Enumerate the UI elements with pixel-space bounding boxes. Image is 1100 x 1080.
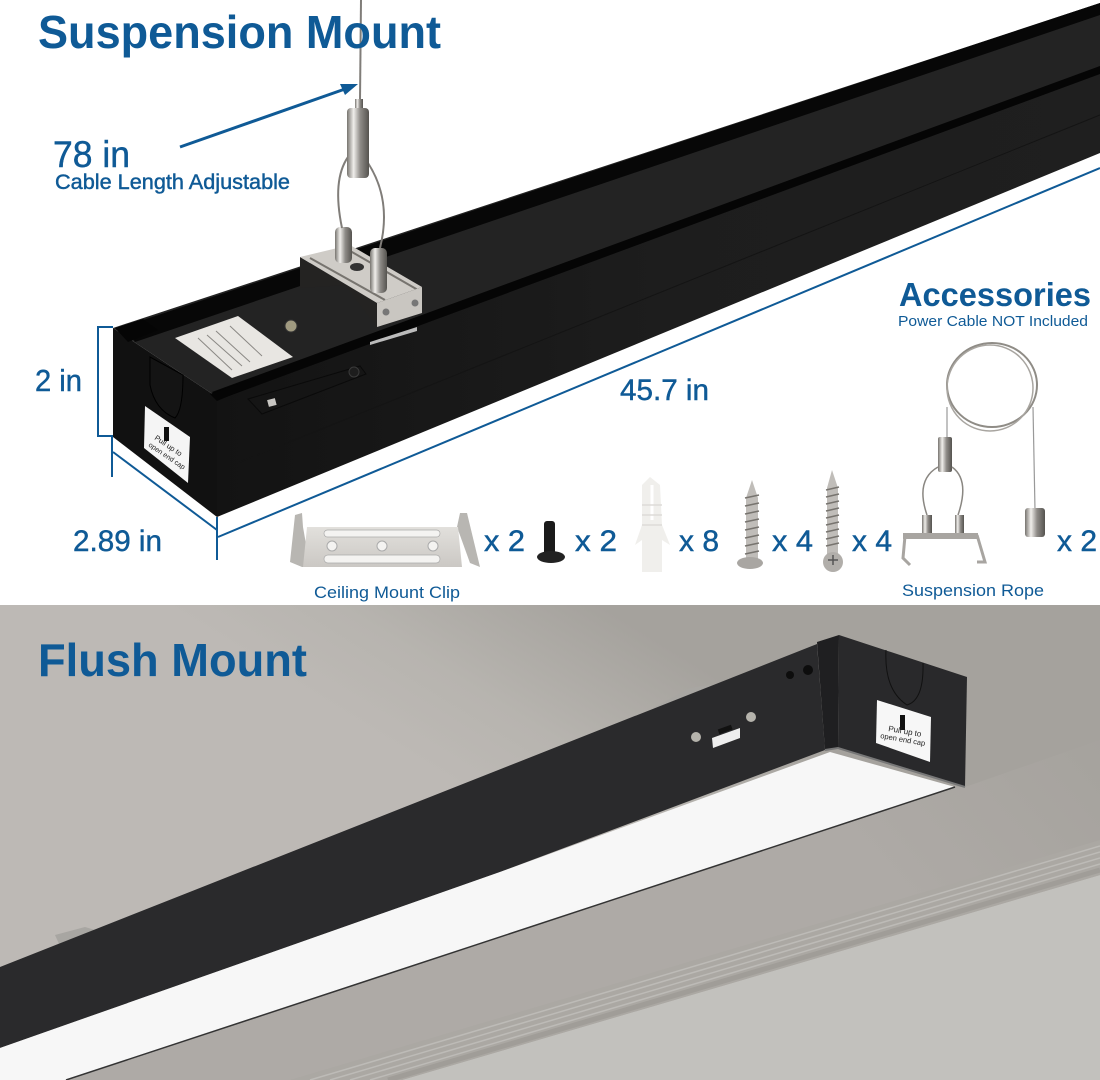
dimension: length 45.7 in	[218, 168, 1100, 537]
arrow: cable length	[180, 84, 358, 147]
mounting clips behind fixture	[55, 685, 715, 946]
accessories heading	[898, 276, 1091, 330]
long wood screw: x 4	[852, 525, 892, 558]
end cap label: open end cap	[880, 731, 926, 748]
suspension rope labels	[902, 525, 1097, 600]
panel: flush mount	[0, 605, 1100, 1080]
black screw: x 2	[575, 525, 617, 558]
fixture: suspended black linear light	[113, 3, 1100, 517]
suspension rope labels: x 2	[1057, 525, 1097, 558]
short wood screw: x 4	[772, 525, 813, 558]
cable length text: Cable Length Adjustable	[55, 170, 290, 194]
cable length text	[53, 134, 290, 194]
end cap label: Pull up to	[888, 724, 923, 739]
ceiling tile and vent band	[68, 740, 1100, 1080]
accessories heading: Accessories	[899, 276, 1091, 313]
wall anchor	[635, 477, 719, 572]
fixture: flush mounted black linear light	[0, 635, 967, 1080]
wall anchor: x 8	[679, 525, 719, 558]
screw	[285, 320, 297, 332]
panel: suspension mount	[0, 0, 1100, 605]
dimension: height 2 in	[35, 327, 113, 477]
dimension: height 2 in: 2 in	[35, 363, 82, 398]
long wood screw	[823, 470, 892, 572]
end cap label: Pull up to	[153, 433, 184, 458]
accessories heading: Power Cable NOT Included	[898, 314, 1088, 330]
end cap label	[144, 406, 190, 483]
switch label	[712, 725, 740, 748]
ceiling mount clip	[290, 513, 525, 602]
dimension: width 2.89 in	[73, 452, 217, 560]
dimension: width 2.89 in: 2.89 in	[73, 525, 162, 558]
mounting bracket and cable	[300, 0, 422, 345]
dimension: length 45.7 in: 45.7 in	[620, 374, 709, 407]
end cap label: open end cap	[147, 442, 186, 471]
cable length text: 78 in	[53, 134, 130, 175]
end cap label	[876, 700, 931, 762]
black screw	[537, 521, 617, 563]
ceiling mount clip: x 2	[484, 525, 525, 558]
ceiling mount clip: Ceiling Mount Clip	[314, 583, 460, 602]
top product label	[175, 316, 293, 378]
short wood screw	[737, 480, 813, 569]
suspension rope kit	[903, 343, 1045, 565]
heading: suspension mount: Suspension Mount	[38, 6, 441, 58]
heading: flush mount: Flush Mount	[38, 634, 307, 686]
suspension rope labels: Suspension Rope	[902, 581, 1044, 600]
